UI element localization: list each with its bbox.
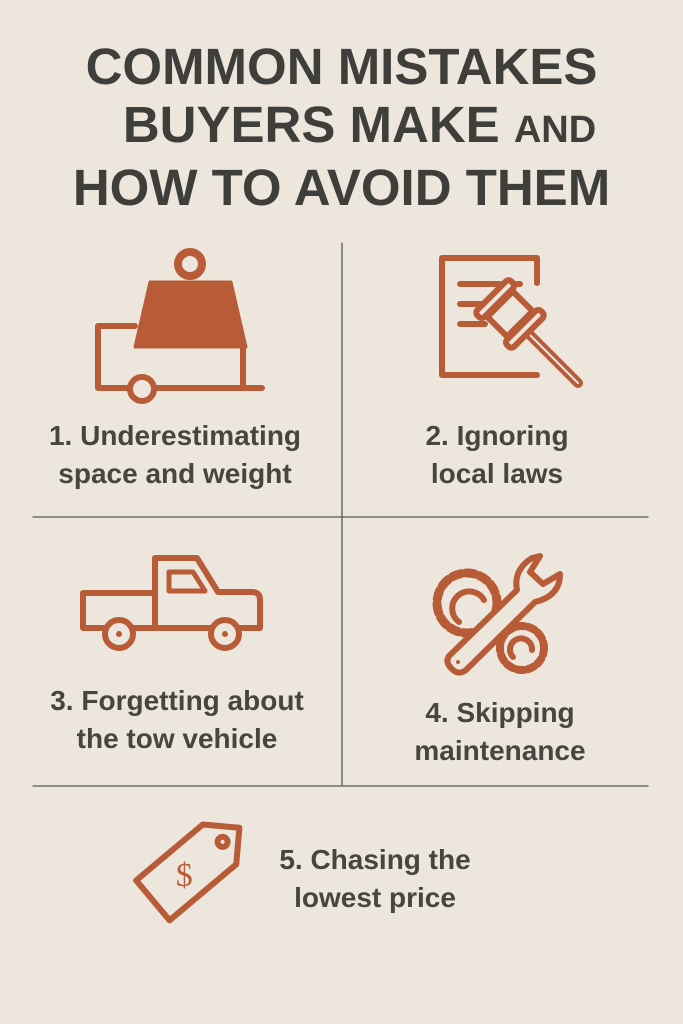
label 2: 2. Ignoring <box>425 420 569 451</box>
label 5: 5. Chasing the <box>279 844 471 875</box>
label 2: local laws <box>431 458 563 489</box>
title: COMMON MISTAKES <box>86 38 597 95</box>
label 4 <box>414 697 586 766</box>
label 3 <box>50 685 304 754</box>
icon: price tag: $ <box>176 857 193 894</box>
title <box>73 38 610 216</box>
icon: price tag <box>136 808 256 920</box>
label 5 <box>279 844 471 913</box>
icon: document with gavel <box>442 258 578 383</box>
icon: weight on trailer <box>98 252 262 401</box>
icon: gears and wrench <box>437 556 560 673</box>
label 1 <box>49 420 301 489</box>
label 3: 3. Forgetting about <box>50 685 304 716</box>
label 2 <box>425 420 569 489</box>
title: HOW TO AVOID THEM <box>73 159 610 216</box>
label 3: the tow vehicle <box>77 723 277 754</box>
label 4: 4. Skipping <box>425 697 575 728</box>
icon: pickup truck <box>83 558 260 648</box>
label 1: 1. Underestimating <box>49 420 301 451</box>
label 1: space and weight <box>58 458 292 489</box>
label 4: maintenance <box>414 735 586 766</box>
label 5: lowest price <box>294 882 456 913</box>
title: BUYERS MAKE AND <box>123 96 596 153</box>
